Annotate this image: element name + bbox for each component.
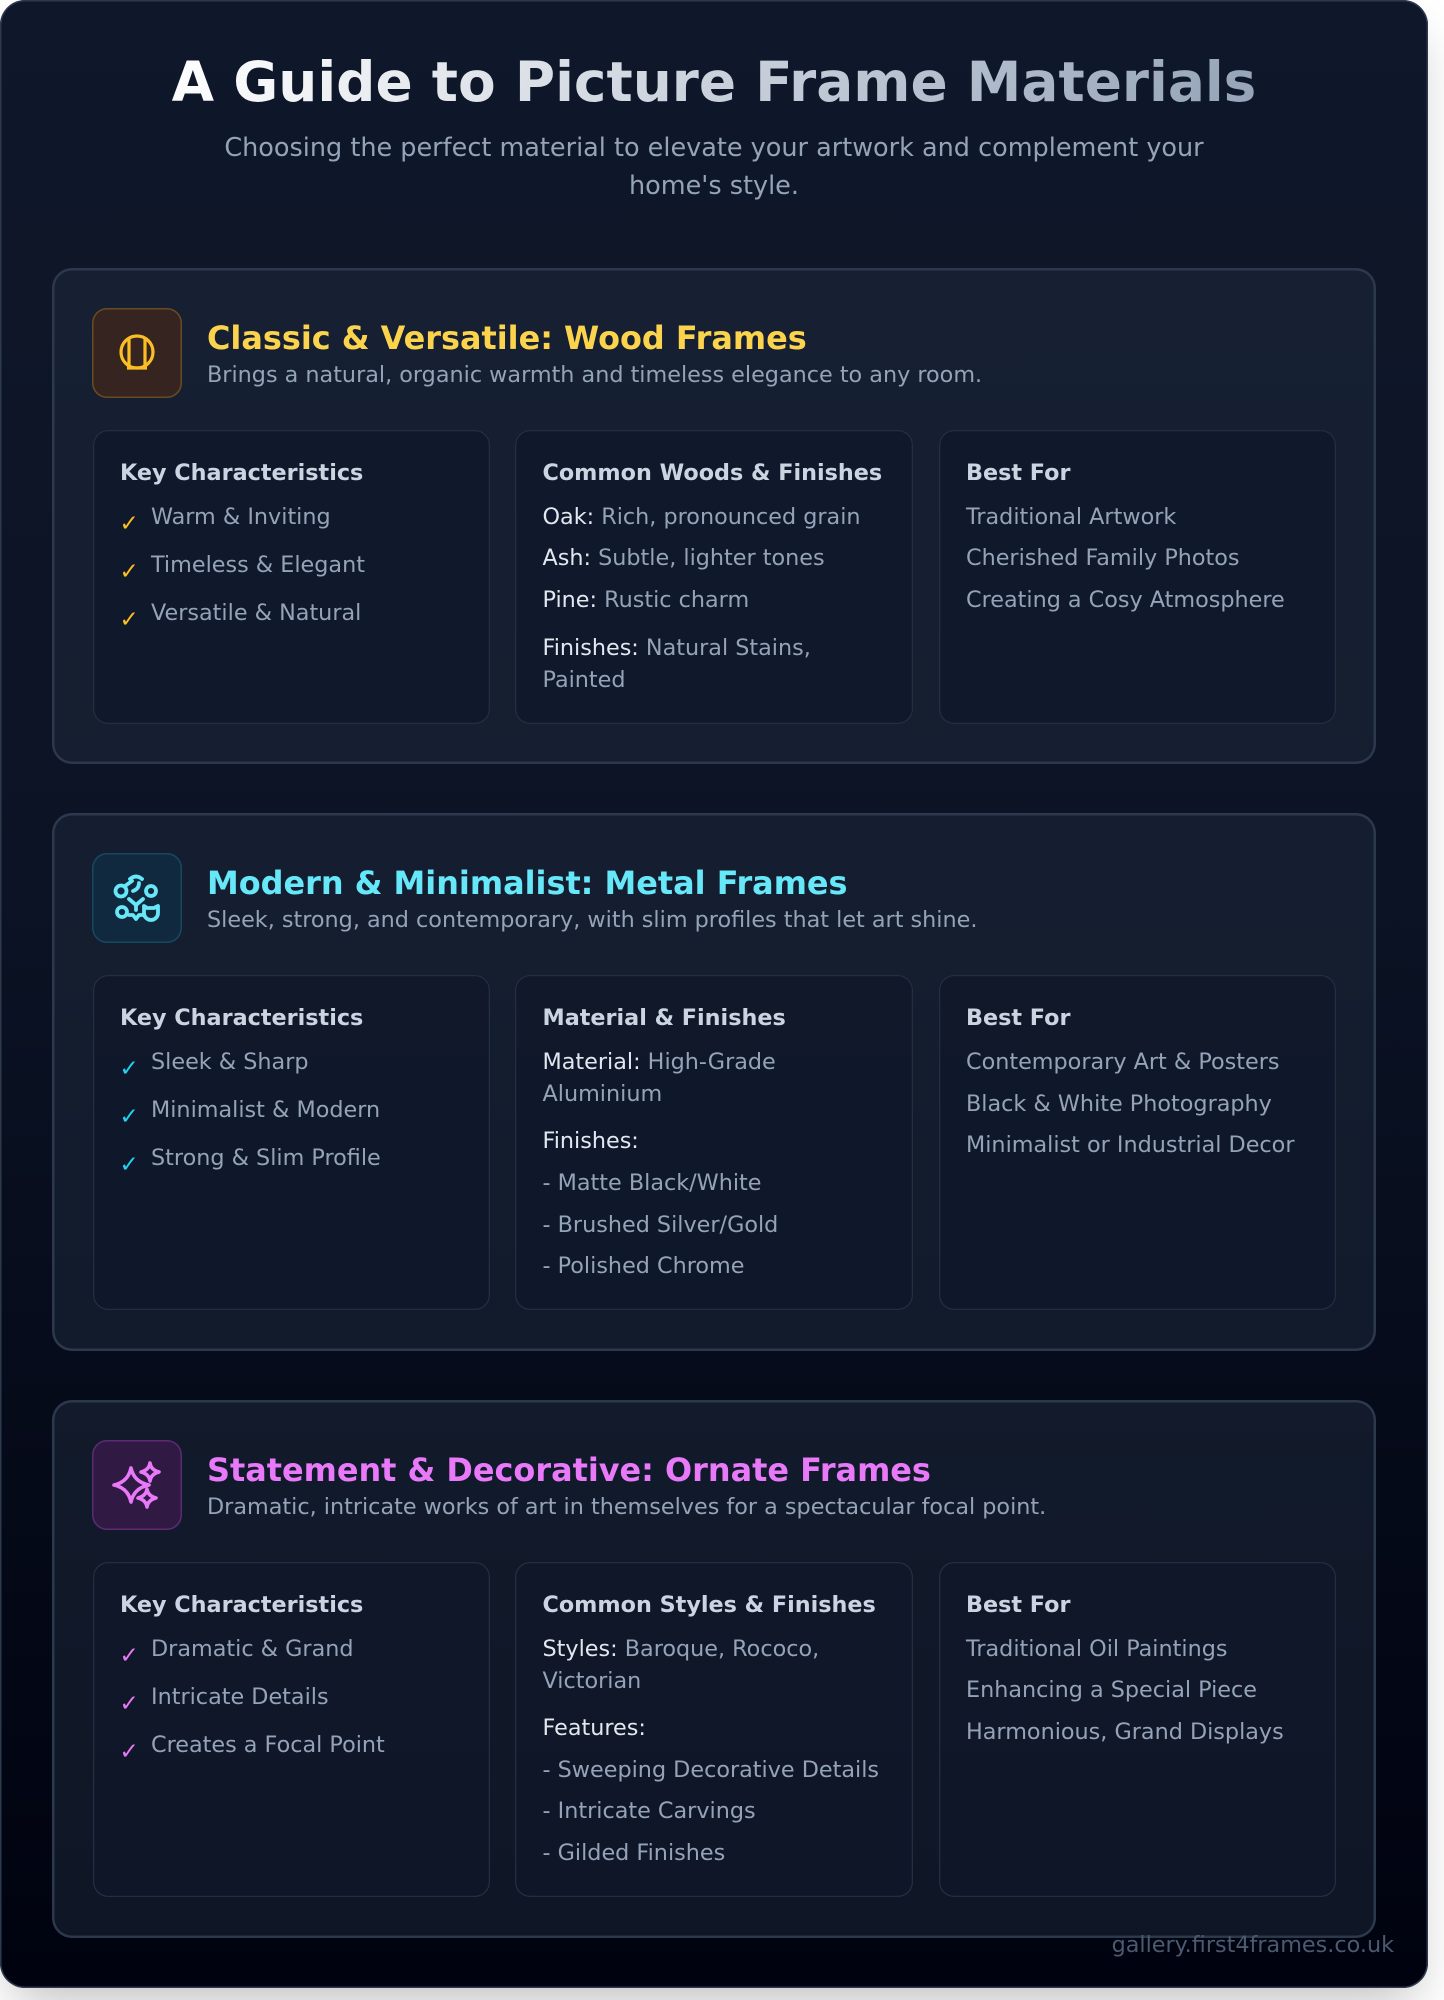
item (120, 552, 365, 585)
card: ornate best for (938, 1562, 1336, 1897)
item: Dramatic & Grand (151, 1636, 354, 1662)
feature: - Sweeping Decorative Details (542, 1757, 879, 1783)
item: Enhancing a Special Piece (966, 1677, 1257, 1703)
item: ✓ (120, 1104, 139, 1130)
item (120, 504, 331, 537)
title: A Guide to Picture Frame Materials (172, 50, 1256, 114)
card heading: Key Characteristics (120, 1592, 363, 1618)
item: Traditional Artwork (966, 504, 1176, 530)
finish: - Matte Black/White (542, 1170, 762, 1196)
item: Minimalist or Industrial Decor (966, 1132, 1294, 1158)
finishes (542, 635, 811, 693)
oak: Oak: Rich, pronounced grain (542, 504, 861, 530)
heading: metal: Modern & Minimalist: Metal Frames (207, 864, 848, 902)
card: woods and finishes (515, 430, 912, 724)
item: Strong & Slim Profile (151, 1145, 381, 1171)
item (120, 1732, 385, 1765)
icon: sparkles (92, 1440, 182, 1530)
card heading: Common Styles & Finishes (542, 1592, 876, 1618)
item: ✓ (120, 1643, 139, 1669)
ash: Ash: Subtle, lighter tones (542, 545, 825, 571)
finish: - Brushed Silver/Gold (542, 1212, 778, 1238)
heading: ornate: Statement & Decorative: Ornate Frames (207, 1451, 931, 1489)
item: Timeless & Elegant (151, 552, 365, 578)
item: Cherished Family Photos (966, 545, 1240, 571)
material (542, 1049, 776, 1107)
item (120, 1684, 329, 1717)
card heading: Best For (966, 1592, 1070, 1618)
item: ✓ (120, 1152, 139, 1178)
card heading: Material & Finishes (542, 1005, 786, 1031)
card: metal characteristics (92, 975, 490, 1310)
item: Versatile & Natural (151, 600, 361, 626)
card: metal best for (938, 975, 1336, 1310)
subtitle: Choosing the perfect material to elevate your artwork and complement your (224, 133, 1204, 163)
features label: Features: (542, 1715, 646, 1741)
icon: wood frame (92, 308, 182, 398)
card heading: Best For (966, 460, 1070, 486)
heading: wood: Classic & Versatile: Wood Frames (207, 319, 807, 357)
subtitle (224, 133, 1204, 201)
styles: Victorian (542, 1668, 641, 1694)
item: ✓ (120, 1739, 139, 1765)
finish: - Polished Chrome (542, 1253, 744, 1279)
item: Creates a Focal Point (151, 1732, 385, 1758)
card: ornate characteristics (92, 1562, 490, 1897)
item (120, 1049, 309, 1082)
item (120, 600, 361, 633)
item: Creating a Cosy Atmosphere (966, 587, 1285, 613)
card: wood best for (938, 430, 1336, 724)
styles (542, 1636, 819, 1694)
item: Contemporary Art & Posters (966, 1049, 1279, 1075)
panel: ornate frames (52, 1400, 1376, 1938)
panel: metal frames (52, 813, 1376, 1351)
styles: Styles: Baroque, Rococo, (542, 1636, 819, 1662)
item: ✓ (120, 559, 139, 585)
item: ✓ (120, 511, 139, 537)
item: ✓ (120, 1056, 139, 1082)
icon: metal (92, 853, 182, 943)
item: Traditional Oil Paintings (966, 1636, 1227, 1662)
item: Warm & Inviting (151, 504, 331, 530)
item: ✓ (120, 1691, 139, 1717)
finishes: Finishes: Natural Stains, (542, 635, 811, 661)
card heading: Best For (966, 1005, 1070, 1031)
card heading: Common Woods & Finishes (542, 460, 882, 486)
item: Sleek & Sharp (151, 1049, 309, 1075)
description: metal: Sleek, strong, and contemporary, with slim profiles that let art shine. (207, 907, 977, 933)
material: Aluminium (542, 1081, 662, 1107)
card: metal finishes (515, 975, 912, 1310)
feature: - Gilded Finishes (542, 1840, 725, 1866)
card heading: Key Characteristics (120, 460, 363, 486)
item: ✓ (120, 607, 139, 633)
item: Harmonious, Grand Displays (966, 1719, 1284, 1745)
finishes label: Finishes: (542, 1128, 639, 1154)
item: Black & White Photography (966, 1090, 1272, 1116)
material: Material: High-Grade (542, 1049, 776, 1075)
pine: Pine: Rustic charm (542, 587, 749, 613)
card: ornate styles (515, 1562, 912, 1897)
subtitle: home's style. (629, 171, 799, 201)
card heading: Key Characteristics (120, 1005, 363, 1031)
panel: wood frames (52, 268, 1376, 764)
feature: - Intricate Carvings (542, 1798, 756, 1824)
item (120, 1636, 354, 1669)
item: Minimalist & Modern (151, 1097, 380, 1123)
item: Intricate Details (151, 1684, 329, 1710)
item (120, 1145, 381, 1178)
card: wood characteristics (92, 430, 490, 724)
description: wood: Brings a natural, organic warmth and timeless elegance to any room. (207, 362, 982, 388)
footer url: gallery.first4frames.co.uk (1112, 1932, 1394, 1958)
description: ornate: Dramatic, intricate works of art in themselves for a spectacular focal point. (207, 1494, 1046, 1520)
finishes: Painted (542, 667, 626, 693)
item (120, 1097, 380, 1130)
